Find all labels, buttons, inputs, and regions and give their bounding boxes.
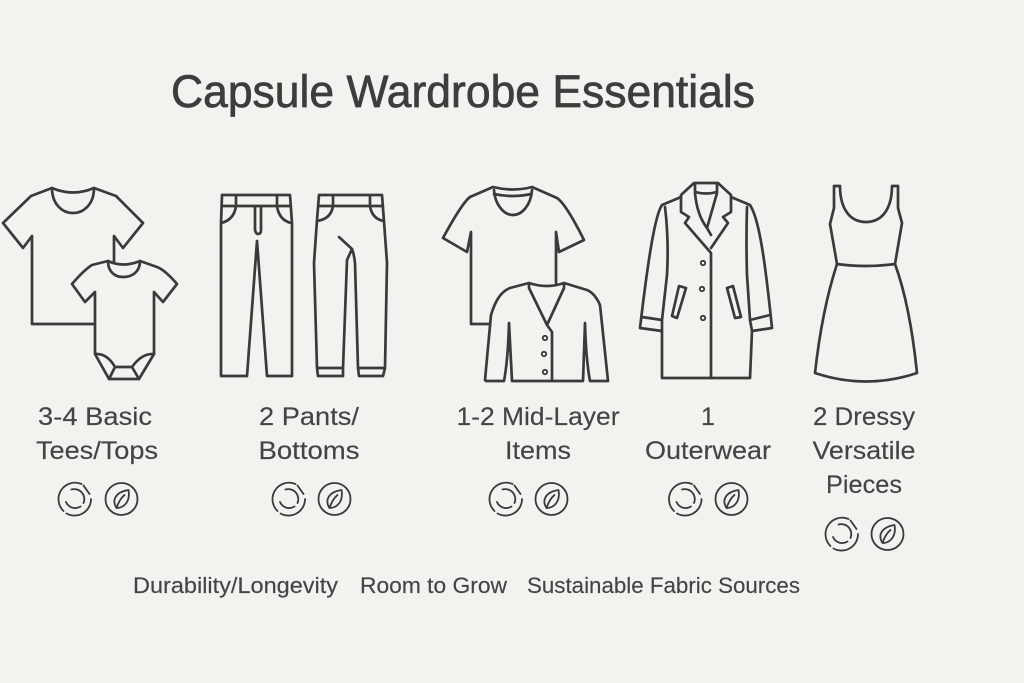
- icons: tees durability and fabric: [58, 483, 137, 516]
- legend: Durability/Longevity: [133, 573, 338, 598]
- label: pants: [258, 403, 360, 465]
- legend: [133, 573, 800, 598]
- icons: pants durability and fabric: [272, 483, 350, 516]
- label: dressy: [812, 403, 916, 499]
- label: pants: Bottoms: [258, 437, 360, 465]
- icons: mid-layer durability and fabric: [489, 483, 568, 516]
- icon: dress: [815, 186, 917, 382]
- title: Capsule Wardrobe Essentials: [171, 66, 755, 117]
- label: tees: 3-4 Basic: [38, 403, 152, 431]
- icon: adult tee and baby onesie: [3, 188, 177, 379]
- label: dressy: Pieces: [826, 471, 902, 499]
- icons: dressy durability and fabric: [825, 518, 904, 551]
- icon: tee and cardigan: [443, 187, 608, 381]
- legend: Room to Grow: [360, 573, 507, 598]
- label: outerwear: 1: [701, 403, 715, 431]
- label: pants: 2 Pants/: [259, 403, 359, 431]
- icon: two pairs of pants: [221, 195, 387, 376]
- label: outerwear: Outerwear: [645, 437, 771, 465]
- label: dressy: Versatile: [812, 437, 916, 465]
- legend: Sustainable Fabric Sources: [527, 573, 800, 598]
- label: mid-layer: 1-2 Mid-Layer: [456, 403, 620, 431]
- icons: outerwear durability and fabric: [669, 483, 748, 516]
- label: mid-layer: [456, 403, 620, 465]
- label: outerwear: [645, 403, 771, 465]
- label: tees: [36, 403, 158, 465]
- icon: coat: [640, 183, 772, 378]
- label: dressy: 2 Dressy: [813, 403, 916, 431]
- label: tees: Tees/Tops: [36, 437, 158, 465]
- label: mid-layer: Items: [505, 437, 571, 465]
